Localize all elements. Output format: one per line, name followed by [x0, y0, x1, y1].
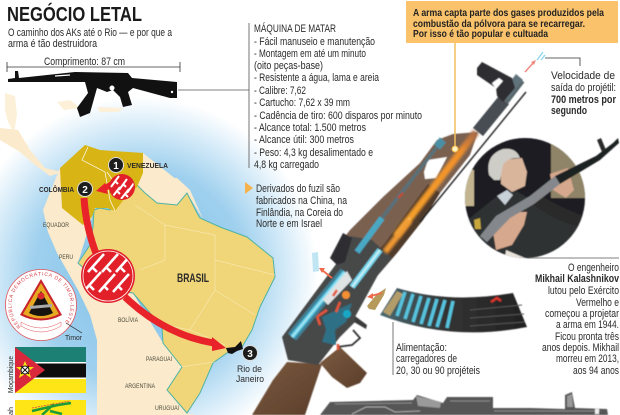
land: Caribbean and Central America [5, 93, 123, 133]
text block: derivatives [256, 183, 348, 230]
subtitle: O caminho dos AKs até o Rio — e por que a [8, 27, 173, 39]
illustration: ejected case [312, 252, 319, 272]
callout: gas operation: Por isso é tão popular e cultuada [413, 28, 548, 40]
illustration: lower rifle photo [320, 392, 608, 415]
rifle handguard band [337, 132, 478, 300]
label: Hezbollah (cropped at the frame edge in the original): ah [6, 407, 15, 415]
lower handguard, dark [368, 184, 440, 275]
emblem: Timor-Leste coat of arms: REPÚBLICA DEMOCRÁTICA DE TIMOR-LESTE [8, 272, 74, 329]
text block: feed: Alimentação: [396, 342, 447, 354]
icon: small red weapons circle [109, 174, 135, 200]
red arrows [317, 290, 340, 350]
label: Rio de Janeiro: Janeiro [236, 374, 264, 385]
recoil spring, blue [292, 272, 345, 337]
icon: black rifle silhouette [8, 71, 177, 117]
label: Peru: PERU [59, 254, 73, 261]
photo: Mikhail Kalashnikov [463, 138, 619, 258]
text block: feed: carregadores de [396, 353, 457, 365]
leader line: muzzle velocity [545, 58, 580, 66]
medals [474, 218, 481, 229]
lower circle white [505, 250, 525, 258]
icon: number 1 marker [108, 158, 124, 172]
internal mechanism, teal [322, 303, 352, 345]
rifle pistol grip [320, 347, 367, 388]
text block: machine specs [254, 22, 422, 171]
arrow: bullet direction [525, 52, 545, 72]
text block: machine specs: - Fácil manuseio e manutenção [254, 36, 375, 48]
text block: machine specs: - Alcance total: 1.500 metros [254, 122, 366, 134]
icon: black rifle at Rio [226, 341, 243, 354]
hair [488, 149, 520, 180]
icon: number 1 marker: 1 [113, 161, 119, 172]
country: Colombia and Venezuela [60, 145, 143, 225]
text block: machine specs: - Calibre: 7,62 [254, 85, 306, 97]
rifle in photo [480, 138, 619, 242]
text block: derivatives: Derivados do fuzil são [256, 183, 340, 195]
label: Brasil: BRASIL [177, 273, 209, 285]
divider: photo caption [527, 257, 619, 259]
text block: feed: 20, 30 ou 90 projéteis [396, 365, 480, 377]
rifle barrel [478, 74, 523, 132]
rifle trigger guard [337, 330, 360, 347]
text block: machine specs: - Peso: 4,3 kg desalimentado e [254, 147, 373, 159]
ocean glow [0, 95, 325, 415]
icon: number 2 marker [78, 182, 92, 196]
rifle magazine in photo [537, 198, 582, 226]
left hand [493, 212, 527, 250]
leader line: Timor [66, 323, 82, 333]
text block: muzzle velocity: Velocidade de [551, 70, 615, 82]
leader line: rifle to specs [178, 23, 249, 168]
arrow: Colombia to Brazil [84, 198, 97, 256]
icon: number 2 marker: 2 [82, 185, 88, 196]
label: Colombia: COLÔMBIA [39, 185, 74, 194]
label: Venezuela: VENEZUELA [127, 161, 169, 170]
subtitle: arma é tão destruidora [8, 38, 98, 50]
rear sight [330, 233, 352, 265]
text block: machine specs: - Montagem em até um minuto [254, 48, 366, 60]
cleaning rod [420, 92, 526, 222]
right hand [550, 168, 574, 198]
panel: map of South America [0, 93, 325, 415]
rifle front sight [477, 62, 515, 102]
text block: derivatives: Norte e em Israel [256, 218, 322, 230]
text block: machine specs: MÁQUINA DE MATAR [254, 22, 336, 35]
callout: gas operation: combustão da pólvora para se recarregar. [413, 18, 585, 30]
text block: muzzle velocity [551, 70, 617, 117]
gas tube, orange [396, 132, 476, 236]
land: Guianas [137, 153, 203, 219]
connector dot [452, 146, 458, 152]
text block: machine specs: (oito peças-base) [254, 60, 323, 72]
label: Paraguai: PARAGUAI [146, 356, 172, 363]
arrow: Venezuela to Colombia [96, 181, 118, 194]
shirt [497, 190, 513, 205]
flag: Hezbollah [15, 400, 86, 415]
rifle receiver [282, 236, 392, 365]
icon: orange marker [245, 182, 253, 194]
label: Argentina: ARGENTINA [125, 383, 156, 390]
label: Bolivia: BOLÍVIA [118, 315, 139, 324]
arrow: Brazil to Rio [125, 297, 226, 351]
leader line: magazine [392, 322, 394, 375]
text block: machine specs: 4,8 kg carregado [254, 159, 319, 171]
label: Uruguai: URUGUAI [155, 405, 179, 412]
piston, cyan [352, 250, 380, 287]
illustration: cutaway AK rifle [252, 62, 526, 415]
bolt carrier [323, 271, 352, 305]
arrow: case ejection [319, 268, 332, 278]
face [500, 158, 527, 192]
label: Mozambique: Moçambique [6, 356, 15, 393]
text block: muzzle velocity: segundo [551, 105, 587, 117]
connector: gas callout line [454, 43, 456, 148]
illustration: magazine [380, 288, 527, 332]
text block: machine specs: - Cartucho: 7,62 x 39 mm [254, 97, 350, 109]
flag: Mozambique [15, 347, 86, 393]
label: Ecuador: EQUADOR [43, 222, 69, 229]
backdrop, right [551, 140, 585, 198]
land: South America countries [43, 153, 200, 415]
label: Timor: Timor [65, 333, 82, 342]
illustration: cartridge [367, 288, 386, 310]
callout: gas operation [406, 1, 618, 43]
text block: Kalashnikov caption [535, 262, 620, 377]
icon: big red weapons circle [81, 249, 135, 303]
label: Rio de Janeiro [236, 364, 264, 385]
dimension line [7, 62, 180, 72]
text block: derivatives: Finlândia, na Coreia do [256, 207, 343, 219]
rifle stock [252, 362, 322, 415]
title: NEGÓCIO LETAL [7, 2, 142, 26]
subtitle [8, 27, 173, 50]
text block: feed [396, 342, 480, 377]
length label: Comprimento: 87 cm [44, 56, 125, 68]
country: Brazil [78, 185, 275, 413]
text block: derivatives: fabricados na China, na [256, 195, 348, 207]
icon: number 3 marker: 3 [247, 349, 253, 360]
jacket [469, 191, 577, 258]
handguard window [424, 157, 447, 179]
text block: machine specs: - Cadência de tiro: 600 disparos por minuto [254, 110, 422, 122]
icon: number 3 marker [242, 346, 258, 360]
arrow: cartridge feed [367, 293, 382, 299]
backdrop, left [463, 170, 474, 206]
text block: machine specs: - Resistente a água, lama e areia [254, 72, 380, 84]
explosion flash [342, 291, 350, 299]
text block: machine specs: - Alcance útil: 300 metros [254, 134, 354, 146]
label: Rio de Janeiro: Rio de [237, 364, 262, 375]
gas piston, blue [357, 140, 443, 252]
